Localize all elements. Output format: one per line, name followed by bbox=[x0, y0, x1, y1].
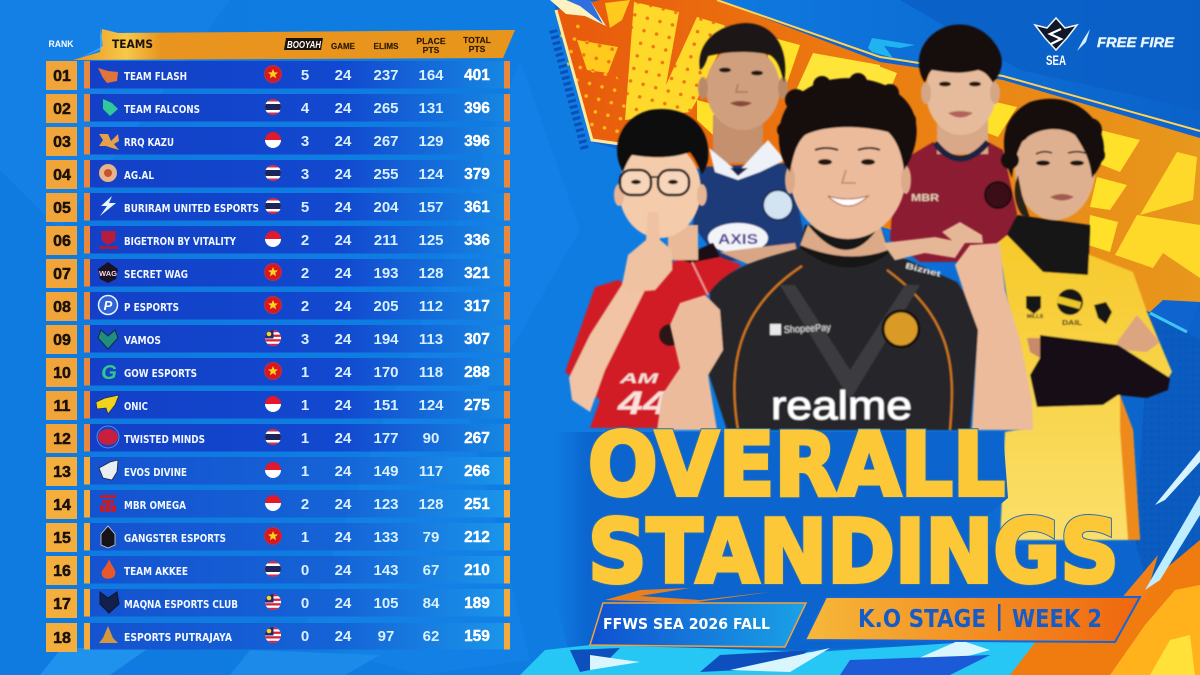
label: place pts: PTS bbox=[423, 45, 440, 55]
row 16: 67 bbox=[423, 562, 439, 579]
row 16: 24 bbox=[335, 562, 352, 579]
row 5 bbox=[46, 193, 510, 222]
row 17 bbox=[46, 589, 510, 618]
row 16: 16 bbox=[53, 563, 71, 580]
row 13: 117 bbox=[419, 463, 443, 480]
row 14: 128 bbox=[418, 496, 444, 513]
row 15 bbox=[46, 523, 510, 552]
row 18: ESPORTS PUTRAJAYA bbox=[124, 632, 232, 644]
row 14 bbox=[46, 490, 510, 519]
row 7: SECRET WAG bbox=[124, 269, 188, 281]
row 15: GANGSTER ESPORTS bbox=[124, 533, 226, 545]
row 14: 24 bbox=[335, 496, 352, 513]
row 15: 24 bbox=[335, 529, 352, 546]
row 7: 24 bbox=[335, 265, 352, 282]
standings table bbox=[46, 61, 510, 652]
row 16: 210 bbox=[464, 562, 490, 579]
row 1: 164 bbox=[418, 67, 444, 84]
row 8: 08 bbox=[53, 299, 71, 316]
badge: KO stage week 2: WEEK 2 bbox=[1012, 604, 1102, 633]
row 1 bbox=[46, 61, 510, 90]
row 13: 149 bbox=[373, 463, 399, 480]
row 17: 105 bbox=[373, 595, 399, 612]
row 8: P ESPORTS bbox=[124, 302, 179, 314]
row 8 bbox=[46, 292, 510, 321]
player: back right bbox=[890, 24, 1017, 262]
row 10: 170 bbox=[373, 364, 399, 381]
row 16 bbox=[46, 556, 510, 585]
row 9: 3 bbox=[301, 331, 309, 348]
row 10: 118 bbox=[419, 364, 443, 381]
row 11 bbox=[46, 391, 510, 420]
label: booyah bbox=[284, 38, 323, 51]
row 3: RRQ KAZU bbox=[124, 137, 174, 149]
row 15: 212 bbox=[464, 529, 490, 546]
row 16: 0 bbox=[301, 562, 309, 579]
title backing panel bbox=[555, 432, 1130, 655]
row 6: 125 bbox=[418, 232, 444, 249]
row 15: 133 bbox=[373, 529, 399, 546]
title: OVERALL STANDINGS: OVERALL bbox=[588, 414, 1005, 516]
row 17: 0 bbox=[301, 595, 309, 612]
label: elims: ELIMS bbox=[374, 41, 399, 51]
row 5: 204 bbox=[373, 199, 399, 216]
row 10: 24 bbox=[335, 364, 352, 381]
title: OVERALL STANDINGS: OVERALL bbox=[588, 414, 1005, 516]
row 1: 01 bbox=[53, 68, 71, 85]
row 1: 237 bbox=[373, 67, 399, 84]
row 4: 04 bbox=[53, 167, 71, 184]
row 6 bbox=[46, 226, 510, 255]
table header bbox=[48, 27, 515, 60]
label: rank: RANK bbox=[48, 39, 74, 49]
row 7: 321 bbox=[464, 265, 490, 282]
header accent bbox=[80, 27, 103, 58]
row 6: BIGETRON BY VITALITY bbox=[124, 236, 236, 248]
row 8: 205 bbox=[373, 298, 399, 315]
row 12: 24 bbox=[335, 430, 352, 447]
row 16: TEAM AKKEE bbox=[124, 566, 188, 578]
row 11: 151 bbox=[373, 397, 399, 414]
row 15: 79 bbox=[423, 529, 439, 546]
row 12: 12 bbox=[53, 431, 71, 448]
row 10 bbox=[46, 358, 510, 387]
row 6: 336 bbox=[464, 232, 490, 249]
row 18: 97 bbox=[378, 628, 394, 645]
icon: bolt bbox=[1077, 29, 1090, 51]
row 17: 84 bbox=[423, 595, 440, 612]
row 3: 24 bbox=[335, 133, 352, 150]
row 15: 15 bbox=[53, 530, 71, 547]
player: left with glasses: 44 bbox=[617, 385, 668, 421]
player: left with glasses: AM bbox=[618, 370, 659, 386]
player: right woman bbox=[997, 99, 1172, 540]
row 7: 128 bbox=[418, 265, 444, 282]
row 5: 24 bbox=[335, 199, 352, 216]
row 4: 3 bbox=[301, 166, 309, 183]
row 1: 5 bbox=[301, 67, 309, 84]
row 5: 157 bbox=[418, 199, 444, 216]
player: back right: MBR bbox=[911, 193, 940, 204]
text: Free Fire: FREE FIRE bbox=[1097, 35, 1175, 50]
header bar bbox=[73, 29, 515, 60]
row 18 bbox=[46, 623, 510, 652]
label: total pts: TOTAL bbox=[463, 35, 491, 45]
row 17: 17 bbox=[53, 596, 71, 613]
logo: FFWS SEA and Free Fire bbox=[1035, 18, 1175, 68]
row 18: 159 bbox=[464, 628, 490, 645]
row 7: WAG bbox=[99, 271, 118, 278]
row 2 bbox=[46, 94, 510, 123]
row 2: 4 bbox=[301, 100, 310, 117]
row 15: 1 bbox=[301, 529, 309, 546]
row 1: 24 bbox=[335, 67, 352, 84]
player: back left bbox=[693, 23, 806, 265]
row 11: 124 bbox=[418, 397, 444, 414]
row 12: TWISTED MINDS bbox=[124, 434, 205, 446]
row 10: 288 bbox=[464, 364, 490, 381]
row 12: 90 bbox=[423, 430, 439, 447]
row 12: 267 bbox=[464, 430, 490, 447]
row 9: 24 bbox=[335, 331, 352, 348]
row 7 bbox=[46, 259, 510, 288]
row 5: 5 bbox=[301, 199, 309, 216]
row 11: ONIC bbox=[124, 401, 148, 413]
row 5: BURIRAM UNITED ESPORTS bbox=[124, 203, 259, 215]
splash: fire at bottom right bbox=[1010, 450, 1200, 675]
row 3: 267 bbox=[373, 133, 399, 150]
row 14: 123 bbox=[373, 496, 399, 513]
row 4: 24 bbox=[335, 166, 352, 183]
row 3: 129 bbox=[418, 133, 444, 150]
player: center: ShopeePay bbox=[784, 323, 831, 336]
badge: KO stage week 2: K.O STAGE bbox=[858, 604, 986, 633]
row 7: 07 bbox=[53, 266, 71, 283]
row 8: 112 bbox=[419, 298, 443, 315]
row 6: 24 bbox=[335, 232, 352, 249]
player: center bbox=[657, 73, 1033, 430]
row 4: AG.AL bbox=[124, 170, 154, 182]
row 4: 124 bbox=[418, 166, 444, 183]
row 13: EVOS DIVINE bbox=[124, 467, 187, 479]
row 3: 03 bbox=[53, 134, 71, 151]
player: center: Biznet bbox=[905, 261, 942, 279]
row 5: 361 bbox=[464, 199, 490, 216]
row 18: 62 bbox=[423, 628, 439, 645]
player: center: realme bbox=[771, 384, 912, 428]
row 2: 02 bbox=[53, 101, 71, 118]
row 7: 2 bbox=[301, 265, 309, 282]
row 13: 266 bbox=[464, 463, 490, 480]
row 8: 24 bbox=[335, 298, 352, 315]
row 11: 24 bbox=[335, 397, 352, 414]
row 14: 251 bbox=[464, 496, 490, 513]
row 9: 307 bbox=[464, 331, 490, 348]
row 3 bbox=[46, 127, 510, 156]
row 17: MAQNA ESPORTS CLUB bbox=[124, 599, 238, 611]
left fist bbox=[657, 295, 723, 430]
row 4: 255 bbox=[373, 166, 399, 183]
row 11: 275 bbox=[464, 397, 490, 414]
row 8: 2 bbox=[301, 298, 309, 315]
row 4 bbox=[46, 160, 510, 189]
background banner bbox=[550, 0, 1200, 332]
row 3: 3 bbox=[301, 133, 309, 150]
row 2: TEAM FALCONS bbox=[124, 104, 200, 116]
badge: KO stage week 2 bbox=[805, 597, 1140, 642]
title: OVERALL STANDINGS: STANDINGS bbox=[588, 501, 1119, 603]
title: OVERALL STANDINGS bbox=[588, 414, 1119, 603]
row 13: 24 bbox=[335, 463, 352, 480]
row 18: 24 bbox=[335, 628, 352, 645]
row 1: TEAM FLASH bbox=[124, 71, 187, 83]
row 14: 2 bbox=[301, 496, 309, 513]
row 7: 193 bbox=[373, 265, 399, 282]
label: teams: TEAMS bbox=[112, 37, 153, 51]
row 13 bbox=[46, 457, 510, 486]
row 9: 113 bbox=[419, 331, 443, 348]
row 14: MBR OMEGA bbox=[124, 500, 186, 512]
row 18: 0 bbox=[301, 628, 309, 645]
row 9: 09 bbox=[53, 332, 71, 349]
label: game: GAME bbox=[331, 41, 355, 51]
row 2: 131 bbox=[418, 100, 444, 117]
row 2: 24 bbox=[335, 100, 352, 117]
row 4: 379 bbox=[464, 166, 490, 183]
player: left with glasses bbox=[565, 109, 742, 428]
row 9 bbox=[46, 325, 510, 354]
row 17: 24 bbox=[335, 595, 352, 612]
player: right woman: MILLS bbox=[1027, 314, 1044, 320]
banner letter shapes bbox=[577, 0, 1200, 278]
row 6: 2 bbox=[301, 232, 309, 249]
splash: water at bottom bbox=[520, 545, 1200, 675]
row 2: 396 bbox=[464, 100, 490, 117]
row 12 bbox=[46, 424, 510, 453]
row 8: 317 bbox=[464, 298, 490, 315]
title: OVERALL STANDINGS: STANDINGS bbox=[588, 501, 1119, 603]
row 1: 401 bbox=[464, 67, 490, 84]
row 13: 13 bbox=[53, 464, 71, 481]
row 10: 10 bbox=[53, 365, 71, 382]
player: right woman: DAIL bbox=[1062, 320, 1083, 327]
row 18: 18 bbox=[53, 630, 71, 647]
row 9: 194 bbox=[373, 331, 399, 348]
icon: FFWS crown bbox=[1035, 18, 1077, 50]
row 14: 14 bbox=[53, 497, 71, 514]
row 6: 06 bbox=[53, 233, 71, 250]
row 5: 05 bbox=[53, 200, 71, 217]
label: total pts: PTS bbox=[469, 44, 486, 54]
label: place pts: PLACE bbox=[416, 36, 446, 46]
row 11: 1 bbox=[301, 397, 309, 414]
text: SEA: SEA bbox=[1046, 53, 1066, 68]
player: back left: AXIS bbox=[718, 232, 758, 248]
row 12: 177 bbox=[373, 430, 399, 447]
row 2: 265 bbox=[373, 100, 399, 117]
right hand and arm bbox=[883, 222, 1033, 430]
row 12: 1 bbox=[301, 430, 309, 447]
row 17: 189 bbox=[464, 595, 490, 612]
row 3: 396 bbox=[464, 133, 490, 150]
label: booyah: BOOYAH bbox=[287, 40, 322, 51]
row 10: 1 bbox=[301, 364, 309, 381]
row 11: 11 bbox=[54, 398, 71, 415]
badge: FFWS SEA 2026 FALL bbox=[590, 588, 806, 647]
row 13: 1 bbox=[301, 463, 309, 480]
row 10: GOW ESPORTS bbox=[124, 368, 197, 380]
row 9: VAMOS bbox=[124, 335, 161, 347]
row 10: G bbox=[101, 362, 117, 384]
row 8: P bbox=[104, 298, 113, 313]
row 16: 143 bbox=[373, 562, 399, 579]
badge: FFWS SEA 2026 FALL: FFWS SEA 2026 FALL bbox=[603, 615, 770, 633]
row 6: 211 bbox=[374, 232, 398, 249]
